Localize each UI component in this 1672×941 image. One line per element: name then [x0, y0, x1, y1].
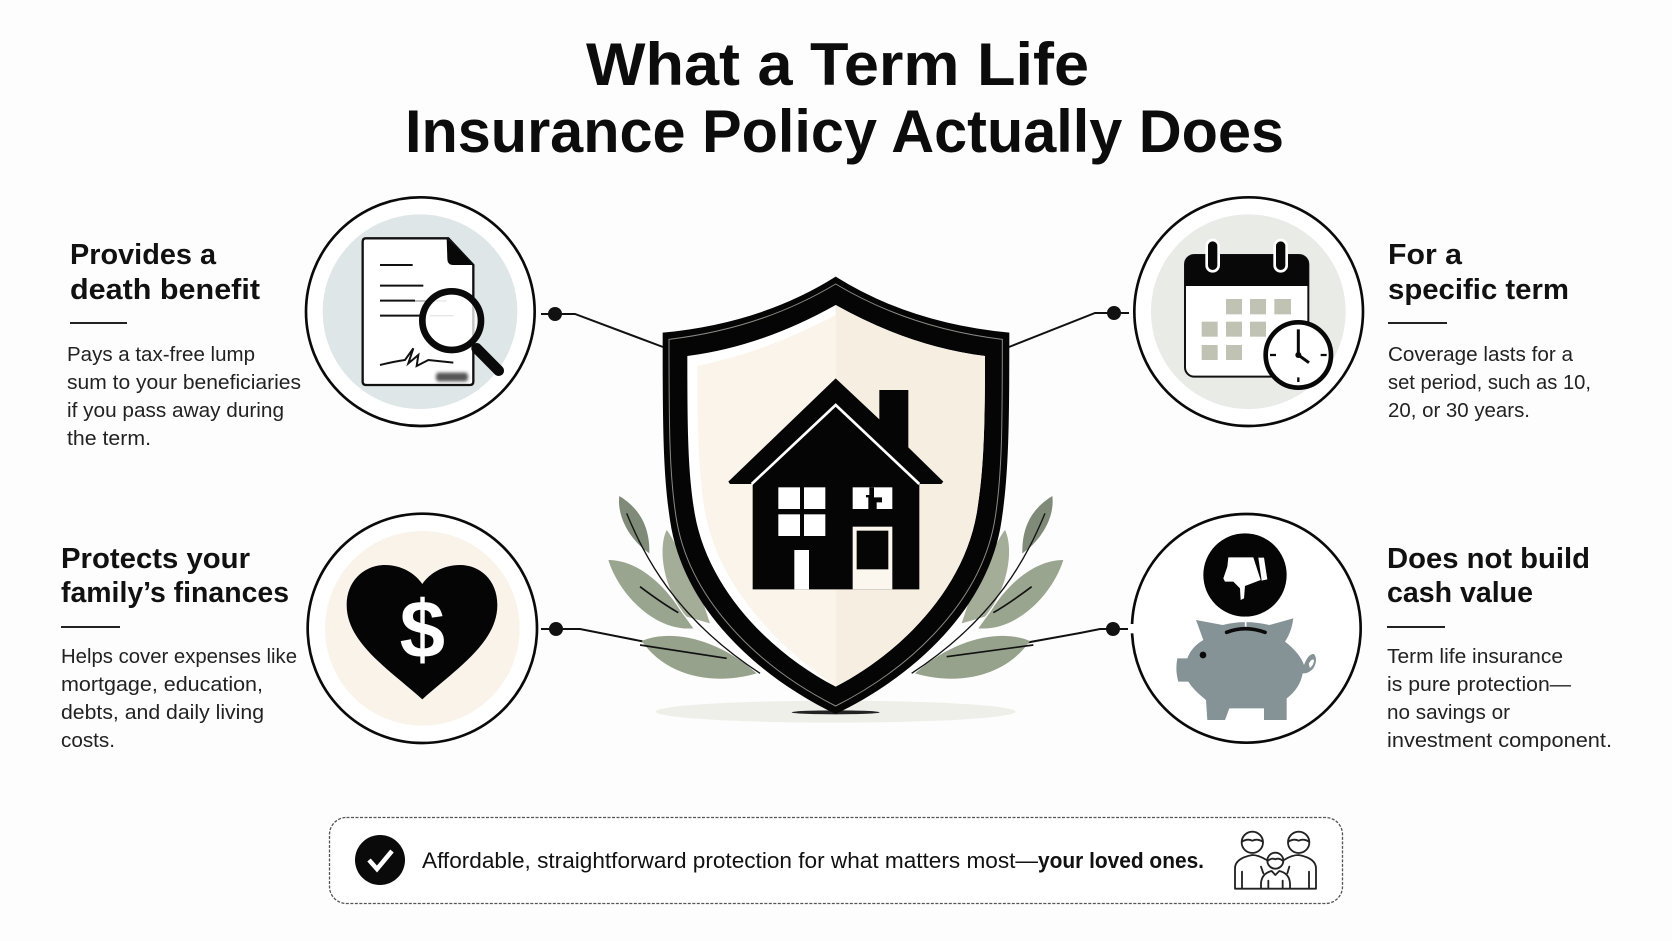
right leaves [912, 496, 1063, 679]
heading: specific term [1388, 274, 1569, 306]
icon: family [1235, 832, 1316, 889]
heading [1387, 543, 1590, 609]
panel: protects your family's finances [61, 514, 537, 752]
text block [1388, 343, 1591, 422]
text block [1387, 645, 1612, 752]
ground shadow [656, 701, 1016, 723]
text block: set period, such as 10, [1388, 371, 1591, 394]
text block: the term. [67, 427, 151, 450]
title [405, 31, 1284, 165]
text block [67, 343, 301, 450]
panel: does not build cash value [1128, 514, 1612, 752]
text block: sum to your beneficiaries [67, 371, 301, 394]
text block: Helps cover expenses like [61, 645, 297, 668]
heading: Provides a [70, 239, 217, 271]
icon: heart with dollar: $ [400, 585, 445, 676]
text block: is pure protection— [1387, 673, 1572, 696]
heading [70, 239, 260, 306]
icon: calendar with clock [1134, 197, 1363, 426]
icon: check mark [355, 835, 405, 885]
connector over leaves [640, 645, 1033, 658]
heading: Protects your [61, 543, 250, 575]
shield [663, 277, 1009, 714]
text block: mortgage, education, [61, 673, 263, 696]
icon: house [728, 378, 943, 589]
heading: cash value [1387, 577, 1533, 609]
left leaves [608, 496, 760, 679]
icon: document with magnifier [306, 197, 535, 426]
icon: piggy bank with thumbs down [1128, 514, 1361, 743]
title: Insurance Policy Actually Does [405, 98, 1284, 165]
heading: family’s finances [61, 577, 289, 609]
text block: investment component. [1387, 729, 1612, 752]
text block: costs. [61, 729, 115, 752]
callout [330, 818, 1342, 904]
text block: no savings or [1387, 701, 1510, 724]
panel: for a specific term [1134, 197, 1591, 426]
panel: provides a death benefit [67, 197, 535, 450]
heading: Does not build [1387, 543, 1590, 575]
text block: 20, or 30 years. [1388, 399, 1530, 422]
heading: death benefit [70, 274, 260, 306]
title: What a Term Life [586, 31, 1089, 98]
text block: Term life insurance [1387, 645, 1563, 668]
heading [61, 543, 289, 609]
text block: if you pass away during [67, 399, 284, 422]
central shield illustration [608, 277, 1063, 723]
heading: For a [1388, 239, 1463, 271]
icon: heart with dollar [308, 514, 537, 743]
text block: Pays a tax-free lump [67, 343, 255, 366]
callout text: Affordable, straightforward protection for what matters most— [422, 848, 1038, 873]
callout text: your loved ones. [1038, 848, 1204, 873]
heading [1388, 239, 1569, 306]
connector lines [541, 306, 1129, 658]
text block [61, 645, 297, 752]
text block: Coverage lasts for a [1388, 343, 1574, 366]
text block: debts, and daily living [61, 701, 264, 724]
